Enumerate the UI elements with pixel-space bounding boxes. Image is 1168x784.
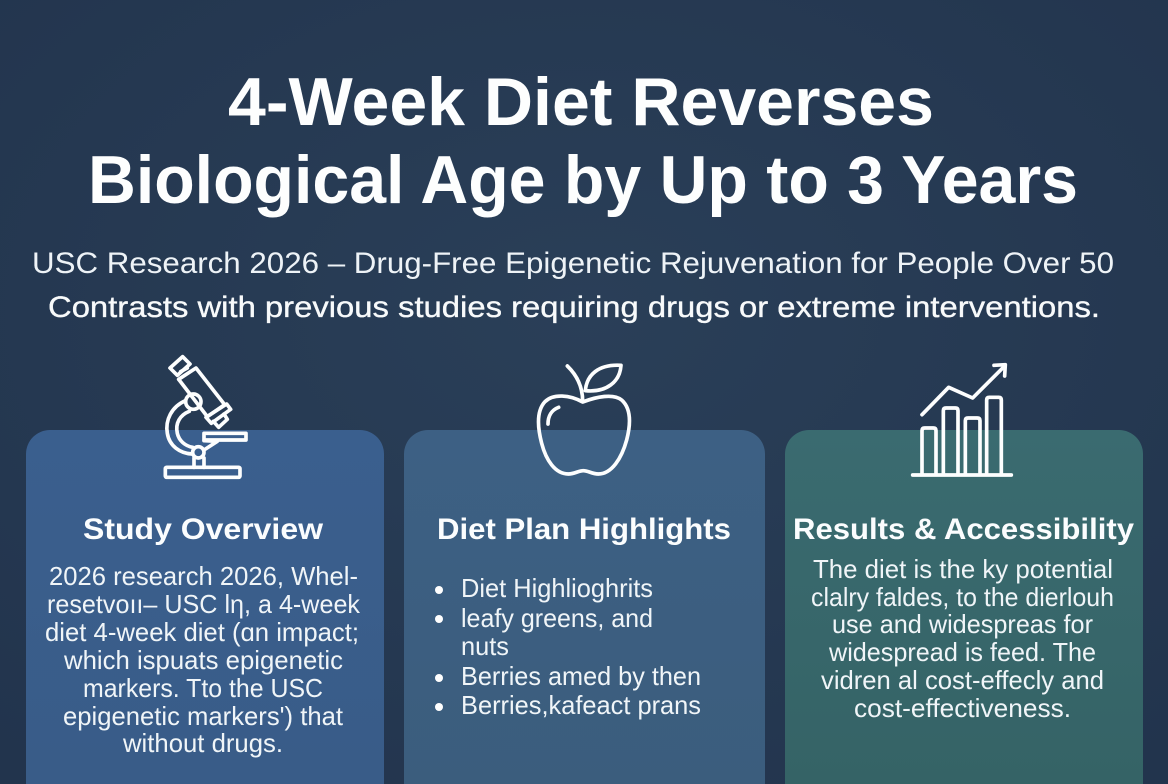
title: 4-Week Diet Reverses	[228, 64, 934, 140]
icon: microscope	[165, 357, 246, 477]
text block: study overview: markers. Tto the USC	[83, 673, 323, 703]
card background: study overview	[26, 430, 384, 784]
heading: diet plan highlights: Diet Plan Highlights	[437, 513, 731, 546]
text block: results: cost-effectiveness.	[854, 693, 1071, 723]
text block: results: widespread is feed. The	[828, 637, 1096, 667]
text block: study overview: without drugs.	[122, 728, 283, 758]
bullet list: diet plan: Diet Highlioghrits	[461, 573, 653, 603]
text block: results	[811, 554, 1114, 723]
text block: study overview: 2026 research 2026, Whel-	[49, 561, 358, 591]
text block: study overview: diet 4-week diet (ɑn impact;	[45, 617, 359, 647]
text block: study overview: resetvoıı– USC lη, a 4-week	[47, 589, 361, 619]
text block: results: clalry faldes, to the dierlouh	[811, 582, 1114, 612]
bullet list: diet plan: nuts	[461, 631, 509, 661]
text block: results: use and widespreas for	[832, 609, 1093, 639]
text block: study overview: which ispuats epigenetic	[63, 645, 343, 675]
bullet list: diet plan: Berries amed by then	[461, 661, 701, 691]
heading: results and accessibility: Results & Accessibility	[793, 513, 1134, 546]
text block: results: The diet is the ky potential	[813, 554, 1113, 584]
card background: results	[785, 430, 1143, 784]
text block: study overview	[45, 561, 361, 758]
panel: results and accessibility	[785, 430, 1143, 784]
subtitle: USC Research 2026 – Drug-Free Epigenetic Rejuvenation for People Over 50	[32, 247, 1114, 280]
bullet list: diet plan: Berries,kafeact prans	[461, 690, 701, 720]
bullet list: diet plan: leafy greens, and	[461, 603, 653, 633]
heading: study overview: Study Overview	[83, 513, 324, 546]
panel: study overview	[26, 430, 384, 784]
panel: diet plan highlights	[404, 430, 765, 784]
bullet list: diet plan	[435, 573, 701, 720]
subtitle	[32, 247, 1114, 324]
card background: diet plan	[404, 430, 765, 784]
text block: results: vidren al cost-effecly and	[821, 665, 1104, 695]
icon: bar chart with rising arrow	[913, 365, 1011, 475]
subtitle: Contrasts with previous studies requiring drugs or extreme interventions.	[48, 291, 1100, 324]
title	[88, 64, 1078, 218]
title: Biological Age by Up to 3 Years	[88, 142, 1078, 218]
text block: study overview: epigenetic markers') that	[63, 701, 344, 731]
icon: apple	[539, 365, 629, 474]
